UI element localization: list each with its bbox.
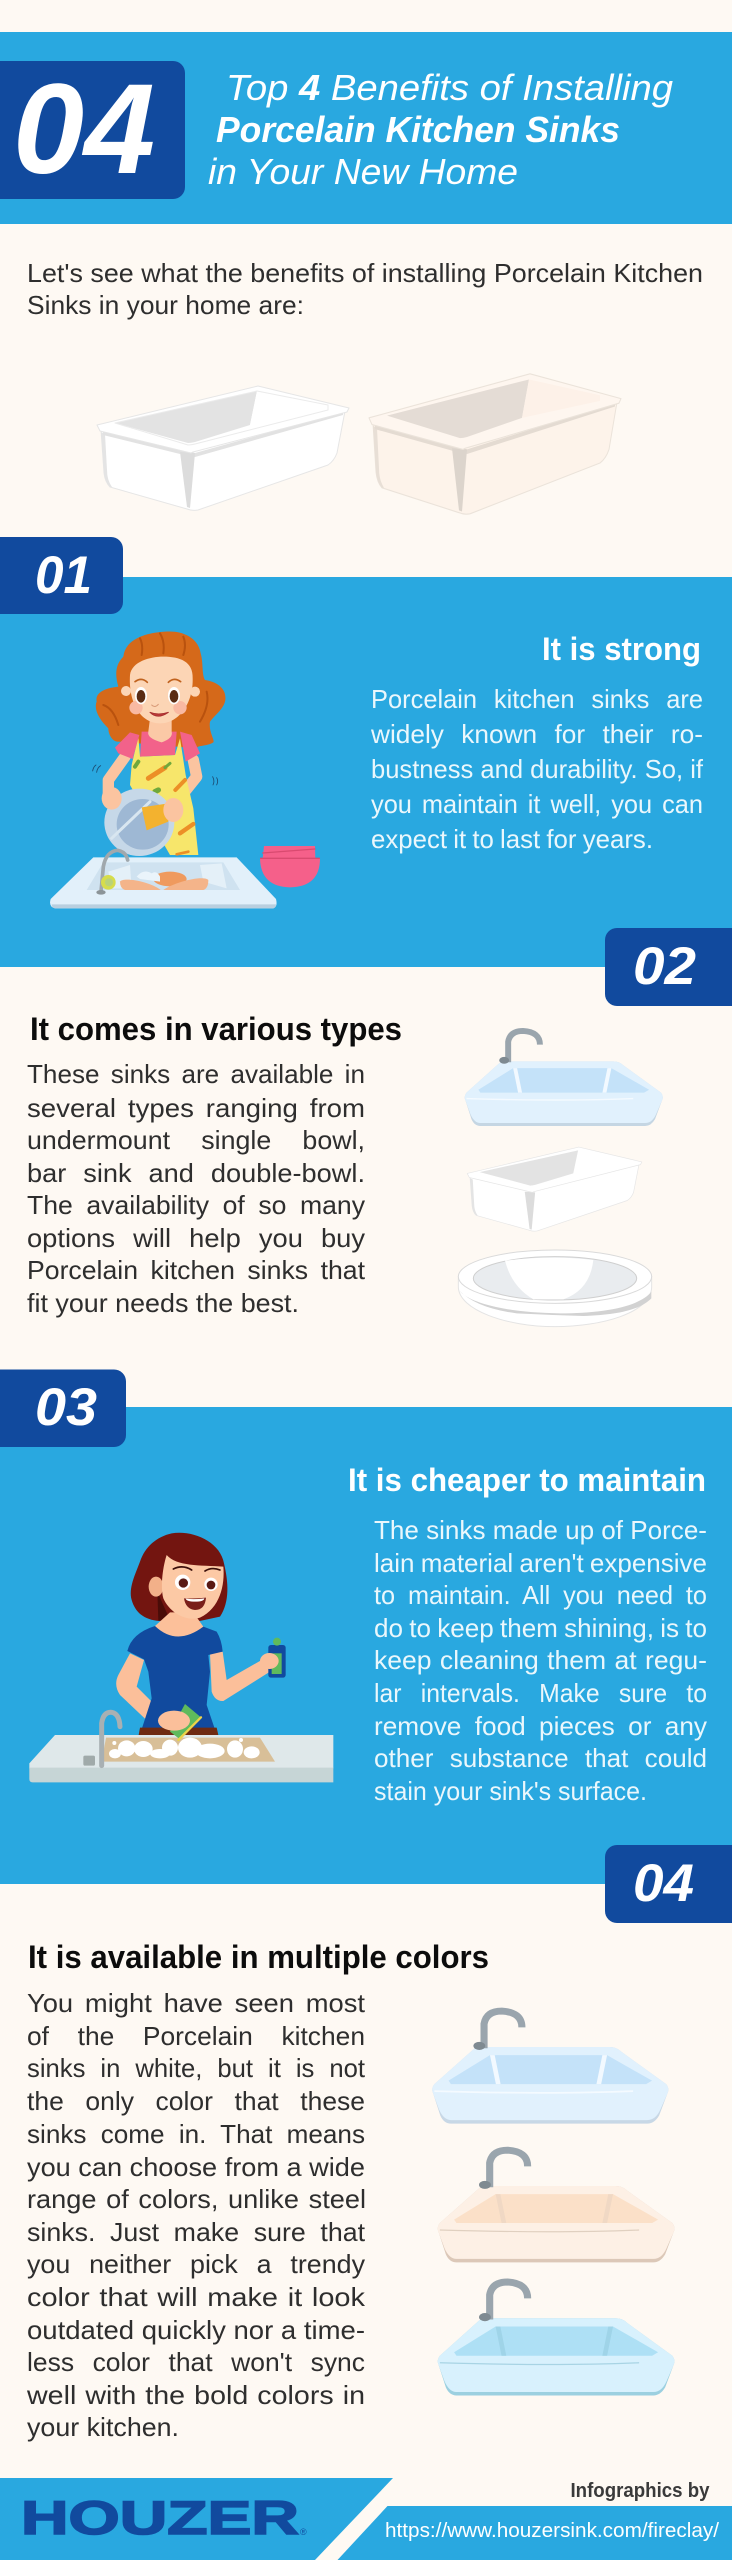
carrots on apron [135, 762, 193, 854]
benefit 4 text: outdated quickly nor a time- [27, 2315, 365, 2345]
benefit 3 text: The sinks made up of Porce- [374, 1515, 707, 1545]
benefit 4 text: well with the bold colors in [26, 2380, 365, 2410]
benefit 3 text: do to keep them shining, is to [374, 1613, 707, 1643]
icon: cream box sink [369, 374, 621, 514]
benefit 1 text: widely known for their ro- [370, 719, 703, 749]
counter [29, 1735, 333, 1768]
benefit 3 text [374, 1515, 707, 1806]
benefit 2 text: bar sink and double-bowl. [27, 1158, 365, 1188]
icon: white box sink small [467, 1147, 642, 1231]
badge 01: 01 [35, 546, 92, 605]
arms [108, 757, 197, 802]
benefit 2 text: The availability of so many [27, 1190, 365, 1220]
neck and face [148, 718, 172, 742]
blouse [115, 732, 200, 762]
badge 03: 03 [35, 1378, 97, 1437]
eyes [135, 687, 180, 704]
hair [131, 1533, 227, 1622]
benefit 4 text: sinks in white, but it is not [27, 2053, 366, 2083]
tan sink and foam [102, 1738, 275, 1762]
benefit 3 text: stain your sink's surface. [374, 1776, 647, 1806]
badge 02 [605, 928, 732, 1006]
badge 02: 02 [633, 937, 696, 996]
logo: HOUZER: HOUZER [21, 2491, 299, 2544]
logo: HOUZER [21, 2491, 307, 2544]
icon: white box sink [97, 386, 349, 510]
panel: benefit 3 band [0, 1407, 732, 1884]
badge 03 [0, 1370, 126, 1447]
benefit 4 heading: It is available in multiple colors [28, 1939, 489, 1975]
benefit 2 text: These sinks are available in [27, 1059, 365, 1089]
illustration: woman washing dishes [29, 1533, 333, 1782]
title [208, 67, 673, 192]
credit label: Infographics by [570, 2480, 710, 2502]
icon: blue sink with faucet [465, 1031, 663, 1126]
blue shirt [127, 1626, 223, 1734]
benefit 3 text: keep cleaning them at regu- [374, 1645, 707, 1675]
badge 01 [0, 537, 123, 614]
benefit 2 text: fit your needs the best. [27, 1288, 299, 1318]
pink bowls [263, 846, 315, 858]
benefit 1 text: you maintain it well, you can [371, 789, 703, 819]
benefit 1 text: expect it to last for years. [371, 824, 653, 854]
benefit 2 text: Porcelain kitchen sinks that [27, 1255, 366, 1285]
benefit 1 text: Porcelain kitchen sinks are [371, 684, 703, 714]
benefit 3 text: to maintain. All you need to [374, 1580, 707, 1610]
plate [104, 789, 174, 856]
arms [116, 1653, 162, 1723]
benefit 4 text: You might have seen most [27, 1988, 366, 2018]
header number badge: 04 [13, 58, 155, 201]
badge 04: 04 [633, 1854, 694, 1913]
benefit 2 text: several types ranging from [27, 1093, 365, 1123]
hand and sponge [170, 1704, 201, 1739]
benefit 3 text: other substance that could [374, 1743, 707, 1773]
dish soap bottle [268, 1638, 286, 1678]
badge 04 [605, 1845, 732, 1923]
benefit 4 text: your kitchen. [27, 2412, 179, 2442]
motion marks [93, 765, 218, 785]
faucet [102, 1712, 120, 1766]
benefit 3 text: remove food pieces or any [374, 1711, 707, 1741]
illustration: girl washing dishes [50, 631, 320, 908]
benefit 4 text: range of colors, unlike steel [27, 2184, 366, 2214]
benefit 3 text: lain material aren't expensive [374, 1548, 707, 1578]
website url: https://www.houzersink.com/fireclay/ [385, 2520, 719, 2542]
icon: round white basin [458, 1250, 652, 1327]
benefit 4 text: less color that won't sync [27, 2347, 365, 2377]
benefit 4 text: you neither pick a trendy [27, 2249, 365, 2279]
benefit 1 heading: It is strong [542, 631, 701, 667]
faucet [101, 850, 128, 892]
panel: benefit 1 band [0, 577, 732, 967]
benefit 4 text [26, 1988, 366, 2442]
benefit 4 text: sinks come in. That means [27, 2119, 365, 2149]
intro text [27, 258, 703, 320]
title: in Your New Home [208, 151, 518, 192]
icon: light blue sink [432, 2011, 668, 2124]
sink [50, 857, 277, 908]
benefit 4 text: you can choose from a wide [27, 2152, 365, 2182]
logo: HOUZER: ® [300, 2527, 307, 2537]
benefit 1 text [370, 684, 704, 854]
benefit 4 text: color that will make it look [27, 2282, 366, 2312]
footer [0, 2478, 732, 2560]
intro text: Let's see what the benefits of installing Porcelain Kitchen [27, 258, 703, 288]
neck [154, 1612, 204, 1637]
benefit 4 text: the only color that these [27, 2086, 365, 2116]
hair [96, 631, 225, 748]
hands and sponge [102, 787, 122, 810]
benefit 4 text: of the Porcelain kitchen [27, 2021, 365, 2051]
benefit 3 heading: It is cheaper to maintain [348, 1462, 706, 1498]
benefit 2 heading: It comes in various types [30, 1011, 402, 1047]
title: Top 4 Benefits of Installing [226, 67, 673, 108]
intro text: Sinks in your home are: [27, 290, 304, 320]
benefit 2 text: options will help you buy [27, 1223, 365, 1253]
icon: peach sink [438, 2150, 674, 2262]
benefit 2 text [27, 1059, 366, 1318]
benefit 2 text: undermount single bowl, [27, 1125, 365, 1155]
benefit 3 text: lar intervals. Make sure to [374, 1678, 707, 1708]
apron [130, 737, 198, 855]
face [149, 1577, 163, 1597]
icon: aqua sink [438, 2282, 674, 2396]
header banner [0, 32, 732, 224]
title: Porcelain Kitchen Sinks [216, 109, 620, 150]
benefit 1 text: bustness and durability. So, if [371, 754, 704, 784]
benefit 4 text: sinks. Just make sure that [27, 2217, 366, 2247]
